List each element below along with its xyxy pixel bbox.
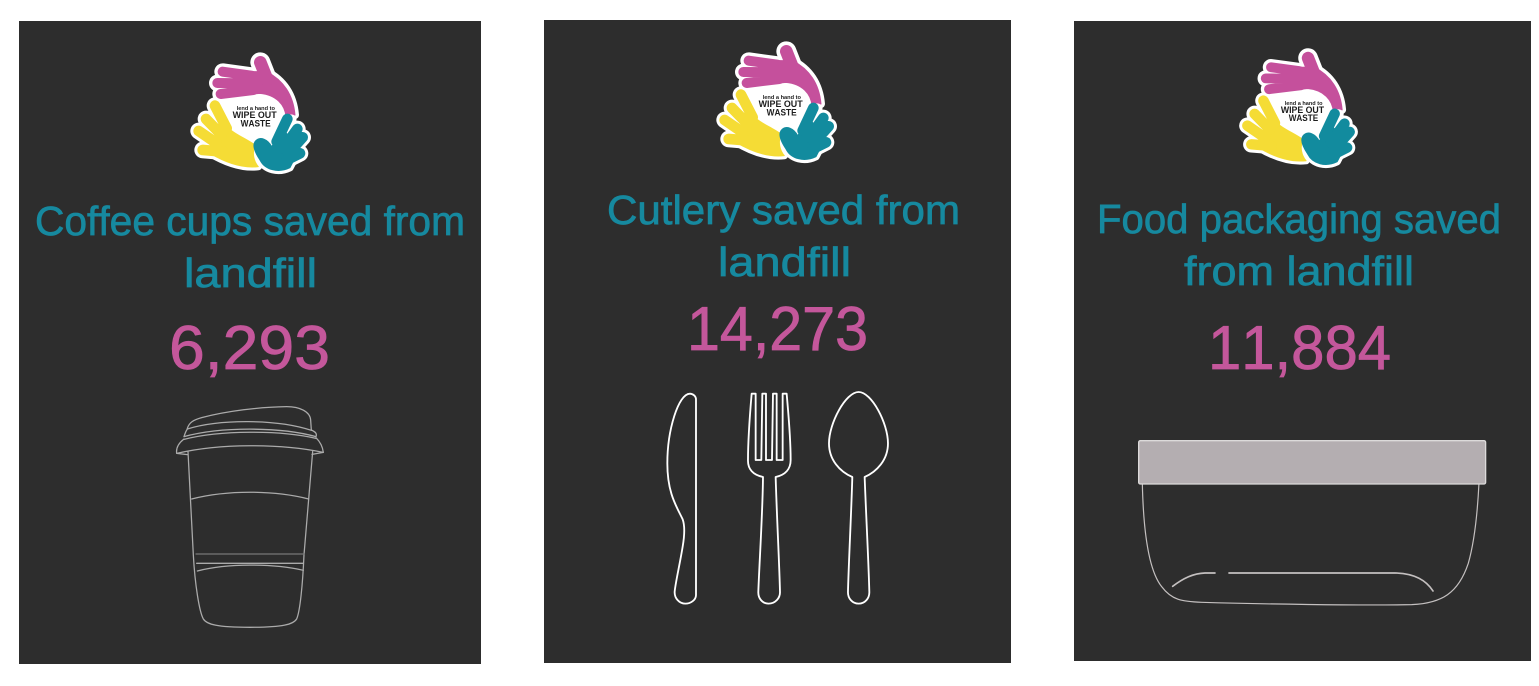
container body (1142, 483, 1479, 605)
logo text: WASTE (767, 107, 797, 117)
heading: landfill (718, 239, 851, 285)
logo text (759, 95, 803, 117)
heading (607, 187, 960, 285)
number: 6,293: 6,293 (169, 314, 330, 383)
icon: coffee cup (177, 407, 323, 627)
logo text: WASTE (241, 118, 271, 128)
icon: spoon (829, 392, 888, 604)
logo text: lend a hand to (237, 106, 276, 112)
heading: Food packaging saved (1097, 196, 1501, 242)
panel: food packaging (1074, 21, 1531, 661)
logo text: WIPE OUT (759, 99, 803, 109)
heading (35, 198, 465, 296)
logo text (1281, 101, 1324, 123)
icon: food container (1139, 441, 1486, 605)
logo text: lend a hand to (1285, 101, 1323, 107)
logo text: WASTE (1289, 113, 1318, 123)
icon: fork (748, 394, 791, 604)
logo text: WIPE OUT (1281, 105, 1324, 115)
container lid (1139, 441, 1486, 484)
logo: wipe out waste hands (199, 62, 303, 170)
heading (1097, 196, 1501, 294)
panel: coffee cups (19, 21, 481, 664)
logo text: WIPE OUT (233, 110, 277, 120)
logo text: lend a hand to (763, 95, 802, 101)
logo: wipe out waste hands (725, 51, 829, 159)
heading: from landfill (1184, 248, 1414, 294)
heading: Coffee cups saved from (35, 198, 465, 244)
logo: wipe out waste hands (1247, 58, 1350, 164)
number: 14,273: 14,273 (687, 295, 868, 364)
logo text (233, 106, 277, 128)
panel: cutlery (544, 20, 1011, 663)
heading: Cutlery saved from (607, 187, 960, 233)
heading: landfill (184, 250, 317, 296)
number: 11,884: 11,884 (1208, 314, 1391, 383)
icon: knife (667, 394, 696, 604)
icon: cutlery (667, 392, 888, 604)
